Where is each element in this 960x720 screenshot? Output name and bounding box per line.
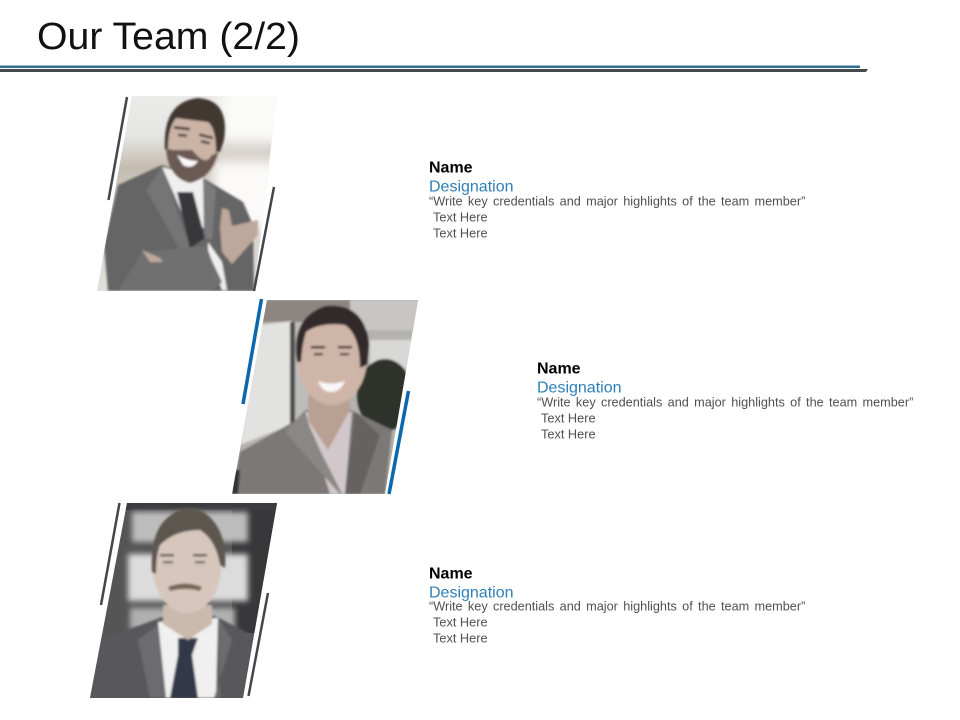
text block: member 3: Designation — [429, 584, 514, 602]
text block: member 1: Text Here — [433, 226, 488, 240]
text block: member 2: Name — [537, 360, 581, 378]
text block: member 3: Name — [429, 566, 473, 582]
accent line: top left — [101, 503, 120, 605]
text block: member 1: Name — [429, 160, 473, 176]
text block: member 3: “Write key credentials and major highlights of the team member” — [429, 600, 805, 614]
text block: member 2: “Write key credentials and major highlights of the team member” — [537, 396, 913, 410]
team member 1 — [90, 90, 805, 295]
accent line: top left — [243, 299, 262, 404]
text block: member 3 — [429, 566, 805, 646]
accent line: top left — [108, 97, 127, 200]
accent line: bottom right — [248, 593, 268, 696]
team member 2 — [225, 295, 913, 500]
text block: member 2 — [537, 360, 913, 442]
photo: smiling man in open collar — [232, 300, 418, 494]
title: Our Team (2/2) — [37, 16, 300, 58]
header rule — [0, 66, 868, 72]
photo: man in suit with dark tie — [90, 503, 277, 698]
text block: member 1 — [429, 160, 805, 240]
text block: member 1: Designation — [429, 178, 514, 196]
text block: member 3: Text Here — [433, 614, 488, 630]
accent line: bottom right — [254, 187, 274, 291]
text block: member 2: Text Here — [541, 426, 596, 442]
text block: member 3: Text Here — [433, 630, 488, 646]
text block: member 2: Text Here — [541, 410, 596, 426]
team member 3 — [85, 498, 805, 703]
text block: member 2: Designation — [537, 380, 622, 396]
text block: member 1: Text Here — [433, 210, 488, 224]
accent line: bottom right — [389, 391, 408, 494]
photo: smiling man in grey suit — [97, 96, 277, 291]
text block: member 1: “Write key credentials and major highlights of the team member” — [429, 194, 805, 208]
